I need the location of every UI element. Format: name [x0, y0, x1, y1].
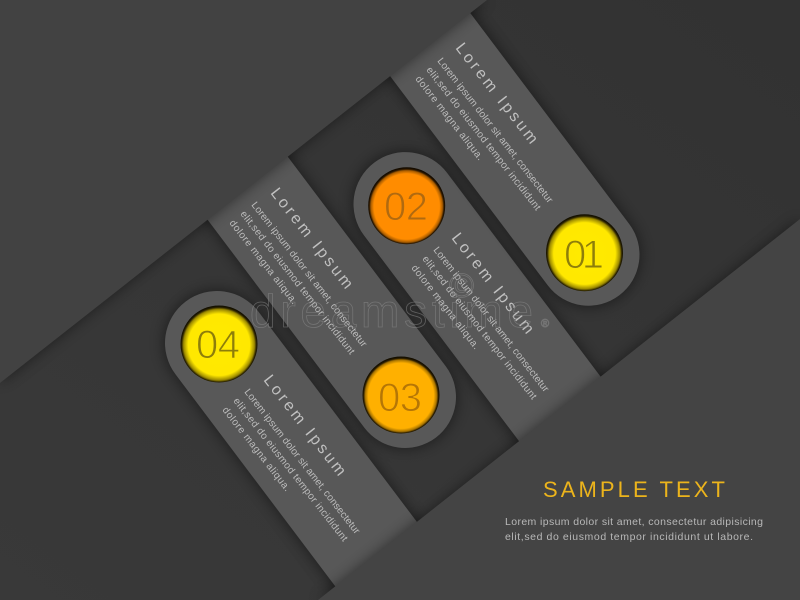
text block 3: Lorem ipsum dolor sit amet, consectetur: [249, 200, 369, 350]
footer paragraph: Lorem ipsum dolor sit amet, consectetur adipisicing: [505, 516, 763, 528]
watermark: ®: [541, 318, 549, 330]
text block 1: dolore magna aliqua.: [413, 74, 485, 163]
text block 1: Lorem Ipsum: [452, 40, 541, 147]
text block 4: Lorem Ipsum: [260, 372, 349, 479]
circle 03: [362, 356, 440, 434]
footer paragraph: [505, 516, 763, 543]
bottom right sheet shadow: [318, 219, 800, 600]
circle 02: 02: [384, 185, 428, 229]
circle 01: [546, 214, 623, 291]
watermark: dreamstime: [250, 285, 533, 337]
text block 3: elit,sed do eiusmod tempor incididunt: [238, 209, 357, 357]
heading: sample text: SAMPLE TEXT: [543, 477, 725, 502]
text block 3: Lorem Ipsum: [267, 185, 356, 292]
text block 3: dolore magna aliqua.: [227, 218, 299, 307]
circle 02: [368, 167, 445, 244]
bottom right sheet: [318, 219, 800, 600]
text block 2: Lorem ipsum dolor sit amet, consectetur: [431, 245, 551, 395]
circle 04: [180, 306, 258, 382]
text block 2: Lorem Ipsum: [448, 230, 537, 337]
watermark: ©: [449, 267, 474, 305]
text block 4: dolore magna aliqua.: [220, 405, 292, 494]
text block 2: dolore magna aliqua.: [409, 263, 481, 352]
top left sheet: [0, 0, 487, 383]
pill 2 with shadow: [331, 130, 630, 477]
text block 4: elit,sed do eiusmod tempor incididunt: [231, 396, 350, 544]
footer paragraph: elit,sed do eiusmod tempor incididunt ut labore.: [505, 531, 753, 543]
text block 4: Lorem ipsum dolor sit amet, consectetur: [242, 387, 362, 537]
pill 3 with shadow: [199, 147, 478, 470]
top left sheet shadow: [0, 0, 487, 383]
circle 04: 04: [196, 323, 240, 367]
pill 1 with shadow: [382, 5, 661, 328]
text block 2: elit,sed do eiusmod tempor incididunt: [420, 254, 539, 402]
circle 01: 01: [564, 233, 604, 277]
text block 1: elit,sed do eiusmod tempor incididunt: [424, 65, 543, 213]
pill 4 with shadow: [143, 269, 426, 596]
text block 1: Lorem ipsum dolor sit amet, consectetur: [435, 56, 555, 206]
circle 03: 03: [378, 376, 422, 420]
